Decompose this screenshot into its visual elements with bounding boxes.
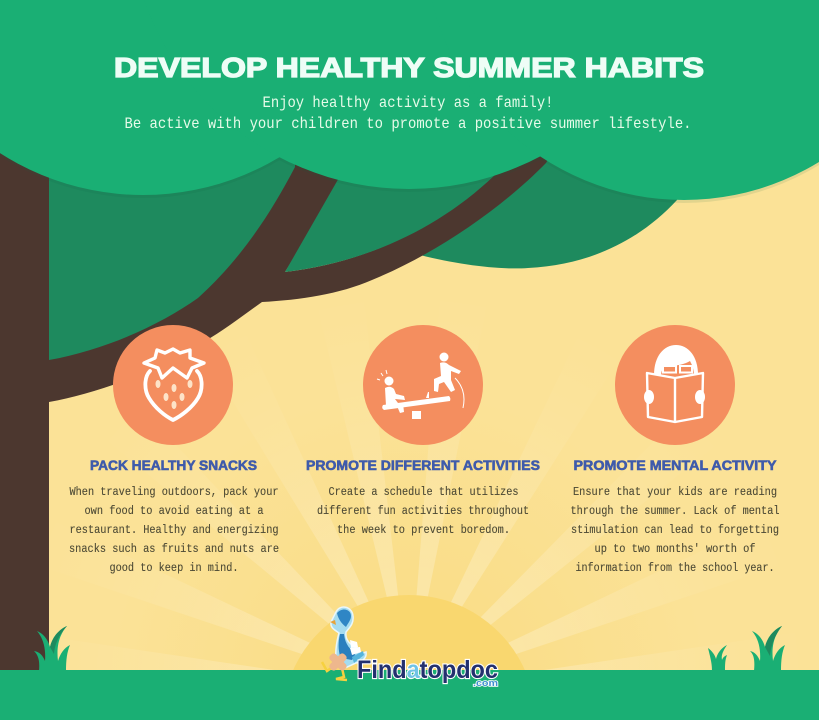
trunk xyxy=(0,130,49,675)
sun glow xyxy=(100,380,720,675)
logo wordmark: Findatopdoc xyxy=(357,656,498,684)
logo: Findatopdoc xyxy=(322,607,498,688)
column 2: promote different activities: Create a schedule that utilizes xyxy=(328,485,518,499)
column 1: pack healthy snacks: PACK HEALTHY SNACKS xyxy=(90,458,257,473)
column 3: promote mental activity: information from the school year. xyxy=(576,561,774,575)
column 2: promote different activities xyxy=(306,458,540,537)
canopy shadow xyxy=(0,0,819,203)
grass: right small xyxy=(708,645,727,671)
icon: child reading book in orange circle xyxy=(615,325,735,445)
column 1: pack healthy snacks: snacks such as fruits and nuts are xyxy=(69,542,279,556)
subtitle: Enjoy healthy activity as a family! xyxy=(262,94,554,112)
tree canopy xyxy=(0,0,819,200)
ground xyxy=(0,670,819,720)
icon: strawberry in orange circle xyxy=(113,325,233,445)
column 3: promote mental activity: stimulation can lead to forgetting xyxy=(571,523,779,537)
column 2: promote different activities: PROMOTE DIFFERENT ACTIVITIES xyxy=(306,458,540,473)
column 3: promote mental activity: up to two months' worth of xyxy=(594,542,756,556)
column 3: promote mental activity: through the summer. Lack of mental xyxy=(570,504,780,518)
column 2: promote different activities: the week to prevent boredom. xyxy=(337,523,510,537)
column 1: pack healthy snacks: When traveling outdoors, pack your xyxy=(70,485,278,499)
icon: duck mascot xyxy=(322,607,366,680)
column 1: pack healthy snacks xyxy=(69,458,279,575)
subtitle xyxy=(124,94,692,133)
column 1: pack healthy snacks: restaurant. Healthy and energizing xyxy=(70,523,278,537)
sun rays xyxy=(138,420,680,670)
logo domain: .com xyxy=(473,678,498,688)
subtitle: Be active with your children to promote a positive summer lifestyle. xyxy=(124,115,692,133)
column 3: promote mental activity: Ensure that your kids are reading xyxy=(573,485,777,499)
tree: trunk and branches xyxy=(0,130,560,402)
grass: right large xyxy=(750,626,785,671)
tree: dark back foliage xyxy=(49,100,677,378)
column 3: promote mental activity xyxy=(570,458,780,575)
column 1: pack healthy snacks: own food to avoid eating at a xyxy=(84,504,264,518)
grass: left xyxy=(34,626,70,671)
icon: children on seesaw in orange circle xyxy=(363,325,483,445)
column 2: promote different activities: different fun activities throughout xyxy=(317,504,529,518)
title: DEVELOP HEALTHY SUMMER HABITS xyxy=(114,52,704,83)
dark foliage between branches xyxy=(285,170,500,272)
column 3: promote mental activity: PROMOTE MENTAL ACTIVITY xyxy=(574,458,776,473)
column 1: pack healthy snacks: good to keep in mind. xyxy=(110,561,238,575)
sun xyxy=(291,595,527,675)
